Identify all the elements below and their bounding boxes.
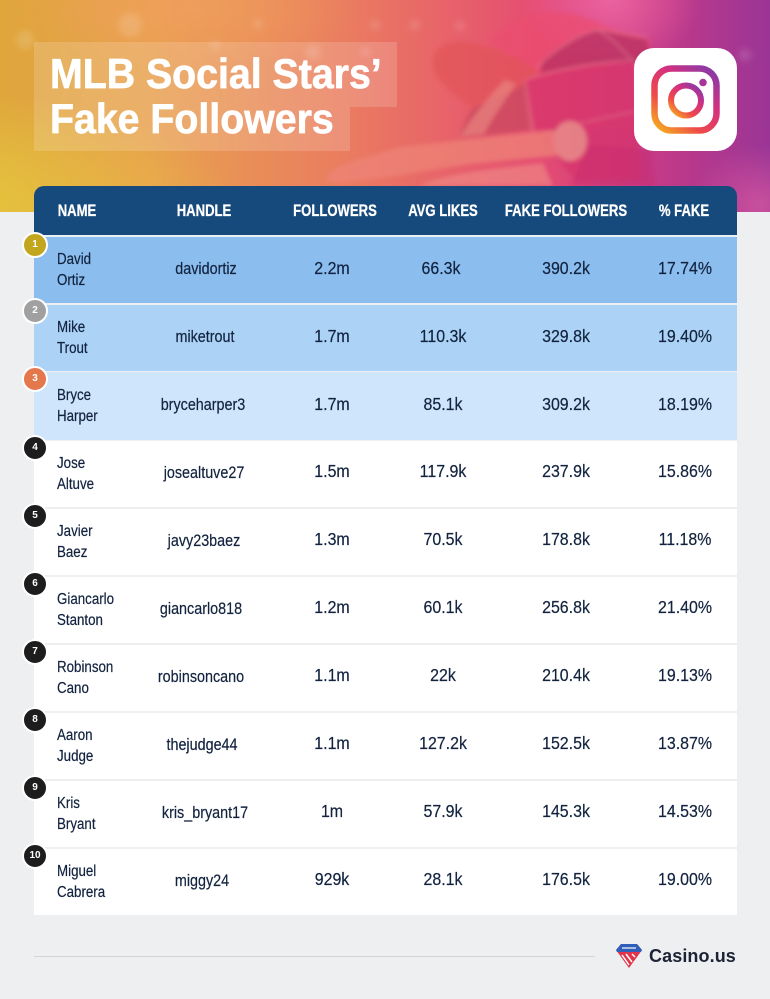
percent fake: 18.19% [658,394,712,414]
handle: davidortiz [175,260,237,278]
fake followers: 309.2k [542,394,590,414]
player name: Aaron [57,727,93,744]
followers: 1.7m [314,326,350,346]
table row 1 [34,237,737,303]
fake followers: 145.3k [542,800,590,820]
player name: Harper [57,408,98,425]
player name [57,251,91,289]
player name [56,455,94,493]
player name: Kris [57,795,80,812]
rank badge 2 [22,298,48,324]
followers: 1.1m [314,732,350,752]
face guard [540,30,652,74]
player name: Javier [57,523,93,540]
fake followers: 390.2k [542,258,590,278]
followers: 1.5m [314,460,350,480]
table row 4 [34,441,737,507]
rank badge 4: 4 [32,442,38,453]
table row 7 [34,645,737,711]
rank badge 6 [22,571,48,597]
player name [57,319,88,357]
percent fake: 15.86% [658,460,712,480]
title panel [34,42,397,151]
rank badge 1 [22,232,48,258]
player name: Robinson [57,659,113,676]
rank badge 6: 6 [32,578,38,589]
header background: gradient with helmet and bat [0,0,770,212]
title line two: Fake Followers [50,95,334,142]
icon: instagram [634,48,737,151]
icon: casino.us gem logo [616,944,642,968]
avg likes: 22k [430,664,456,684]
player name: Miguel [57,863,96,880]
rank badge 9: 9 [32,782,38,793]
followers: 1.1m [314,664,350,684]
player name: Ortiz [57,272,85,289]
table row 10 [34,849,737,915]
fake followers: 152.5k [542,732,590,752]
avg likes: 66.3k [422,258,460,278]
rank badge 5 [22,503,48,529]
handle: kris_bryant17 [162,804,248,822]
player name [57,863,106,901]
column heading: percent fake: % FAKE [659,201,709,220]
player name: David [57,251,91,268]
player name: Bryant [57,816,96,833]
avg likes: 85.1k [424,394,462,414]
player name: Mike [57,319,85,336]
avg likes: 110.3k [420,326,466,346]
rank badge 1: 1 [32,239,38,250]
percent fake: 14.53% [658,800,712,820]
followers: 1m [321,800,343,820]
rank badge 8 [22,707,48,733]
handle: thejudge44 [166,736,238,754]
glove [420,163,553,186]
handle: bryceharper3 [161,396,245,414]
rank badge 8: 8 [32,714,38,725]
percent fake: 19.00% [658,868,712,888]
followers: 929k [315,868,349,888]
fake followers: 256.8k [542,596,590,616]
percent fake: 21.40% [658,596,712,616]
handle: javy23baez [168,532,240,550]
rank badge 10 [22,843,48,869]
title backing upper [34,42,397,107]
table row 6 [34,577,737,643]
fake followers: 329.8k [542,326,590,346]
player name: Cano [57,680,89,697]
fake followers: 210.4k [542,664,590,684]
handle: josealtuve27 [164,464,244,482]
table header [34,186,737,235]
avg likes: 127.2k [419,732,467,752]
percent fake: 19.13% [658,664,712,684]
player name: Trout [57,340,88,357]
rank badge 9 [22,775,48,801]
avg likes: 60.1k [424,596,462,616]
fake followers: 237.9k [542,460,590,480]
percent fake: 11.18% [659,528,711,548]
player name: Baez [57,544,87,561]
column heading: handle: HANDLE [177,201,231,220]
player name: Judge [57,748,93,765]
rank badge 4 [22,435,48,461]
rank badge 5: 5 [32,510,38,521]
followers: 2.2m [314,258,350,278]
title line one: MLB Social Stars’ [50,50,382,97]
player name: Stanton [57,612,103,629]
handle: miketrout [175,328,235,346]
title backing lower [34,107,350,151]
under brim / ear [460,82,532,138]
table row 2 [34,305,737,371]
bat [326,130,565,182]
player name [57,795,96,833]
player name: Bryce [57,387,91,404]
avg likes: 117.9k [420,460,466,480]
followers: 1.3m [314,528,350,548]
column heading: followers: FOLLOWERS [293,201,377,220]
avg likes: 28.1k [424,868,462,888]
rank badge 7: 7 [32,646,38,657]
rank badge 3: 3 [32,373,38,384]
rank badge 10: 10 [29,850,41,861]
handle: giancarlo818 [160,600,242,618]
rank badge 7 [22,639,48,665]
column heading: fake followers: FAKE FOLLOWERS [505,201,627,220]
fake followers: 178.8k [542,528,590,548]
avg likes: 70.5k [424,528,462,548]
percent fake: 17.74% [658,258,712,278]
brim [433,42,540,108]
table row 3 [34,372,737,440]
followers: 1.2m [314,596,350,616]
table row 8 [34,713,737,779]
player name [57,523,93,561]
dome [490,12,650,130]
handle: robinsoncano [158,668,244,686]
player name [57,591,114,629]
table row 9 [34,781,737,847]
column heading: avg likes: AVG LIKES [408,201,478,220]
rank badge 3 [22,366,48,392]
logo wordmark: Casino.us [649,946,736,966]
handle: miggy24 [175,872,229,890]
player name: Giancarlo [57,591,114,608]
percent fake: 19.40% [658,326,712,346]
column heading: name: NAME [58,201,96,220]
rank badge 2: 2 [32,305,38,316]
player name: Altuve [57,476,94,493]
player name: Jose [57,455,85,472]
fake followers: 176.5k [542,868,590,888]
followers: 1.7m [314,394,350,414]
percent fake: 13.87% [658,732,712,752]
player name [56,727,93,765]
table row 5 [34,509,737,575]
title [50,50,382,142]
player name [57,387,98,425]
avg likes: 57.9k [424,800,462,820]
player name: Cabrera [57,884,105,901]
player name [57,659,113,697]
